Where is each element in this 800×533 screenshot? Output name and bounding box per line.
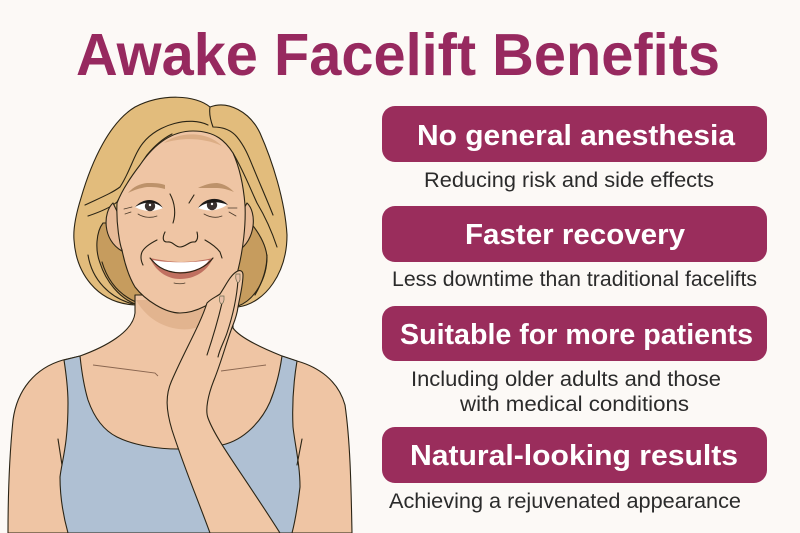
- pill: natural-looking results: [382, 427, 767, 483]
- hair strands: [85, 107, 277, 304]
- torso skin: [8, 295, 352, 533]
- benefit 4: [382, 427, 767, 513]
- face: [117, 131, 245, 313]
- description 3: Including older adults and those: [411, 368, 721, 391]
- neck shadow: [136, 300, 232, 329]
- benefit 1: [382, 106, 767, 192]
- armpit creases: [58, 439, 302, 465]
- ears: [106, 203, 253, 251]
- forehead shadow: [164, 134, 222, 146]
- pill: faster recovery: [382, 206, 767, 262]
- benefit 2: [382, 206, 767, 291]
- illustration: woman touching her cheek: [8, 97, 352, 533]
- heading 2: Faster recovery: [465, 219, 685, 251]
- tank top: [60, 356, 300, 533]
- hand and arm: [167, 271, 280, 533]
- hair back: [74, 97, 287, 307]
- description 1: Reducing risk and side effects: [424, 169, 714, 192]
- collarbones: [93, 365, 266, 376]
- description 3 second line: with medical conditions: [459, 393, 689, 416]
- mouth: [150, 258, 213, 284]
- heading 3: Suitable for more patients: [400, 319, 753, 351]
- heading 1: No general anesthesia: [417, 120, 736, 152]
- eyebrows: [128, 183, 234, 193]
- finger lines: [207, 280, 238, 357]
- pill: suitable for more patients: [382, 306, 767, 361]
- fingernails: [219, 274, 240, 304]
- description 2: Less downtime than traditional facelifts: [392, 268, 757, 291]
- left eye: [124, 200, 163, 217]
- smile lines: [141, 240, 222, 265]
- heading 4: Natural-looking results: [410, 440, 738, 472]
- title: Awake Facelift Benefits: [76, 22, 720, 88]
- hair shadow: [97, 222, 267, 306]
- pill: no general anesthesia: [382, 106, 767, 162]
- nose: [163, 194, 198, 247]
- benefit 3: [382, 306, 767, 416]
- description 4: Achieving a rejuvenated appearance: [389, 490, 741, 513]
- right eye: [198, 199, 237, 217]
